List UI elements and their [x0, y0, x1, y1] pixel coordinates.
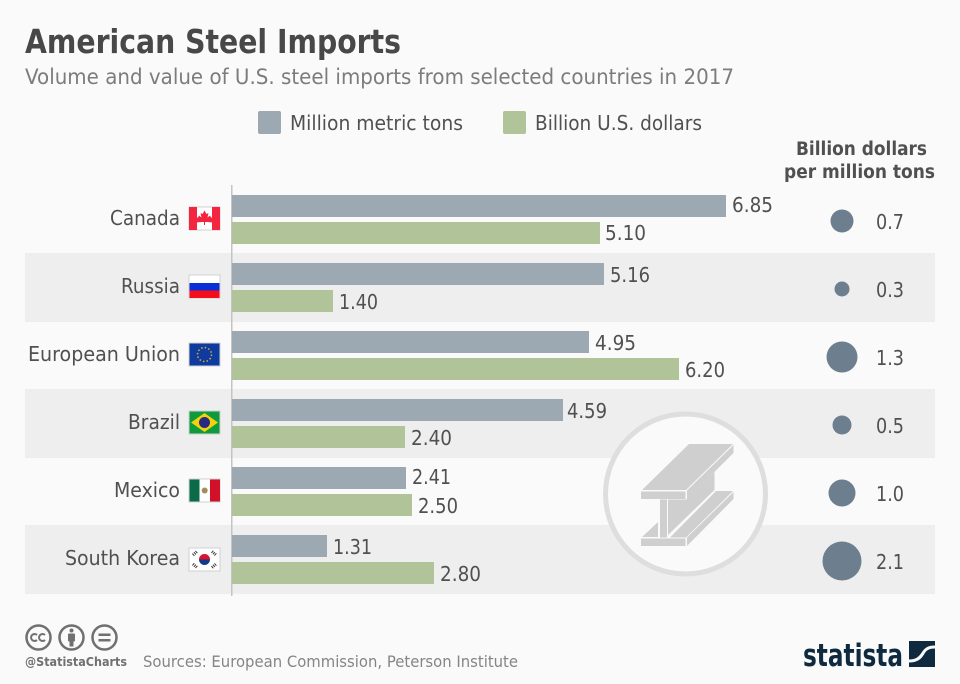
icon: creative commons licence [26, 626, 116, 650]
row: South Korea: 2.1 [876, 550, 904, 574]
row: European Union [28, 331, 904, 382]
legend: Million metric tons [290, 111, 463, 135]
row: Mexico [114, 465, 904, 518]
row: European Union: 1.3 [876, 346, 904, 370]
subtitle: Volume and value of U.S. steel imports from selected countries in 2017 [25, 65, 734, 89]
row: South Korea: 1.31 [333, 535, 372, 559]
row: Brazil: 0.5 [876, 414, 904, 438]
credit handle: @StatistaCharts [25, 654, 127, 669]
row: Brazil [128, 399, 904, 450]
row: Russia: 1.40 [339, 290, 378, 314]
row: Brazil: 2.40 [411, 426, 452, 450]
legend [258, 111, 702, 135]
row: Russia: Russia [121, 274, 180, 298]
row: South Korea: South Korea [65, 546, 180, 570]
column heading: billion dollars per million tons: per million tons [784, 162, 935, 183]
row: Russia: 5.16 [610, 263, 650, 287]
column heading: billion dollars per million tons: Billion dollars [796, 139, 927, 160]
row: European Union: 6.20 [685, 358, 725, 382]
source line: Sources: European Commission, Peterson Institute [143, 652, 518, 671]
row: Canada: 0.7 [876, 210, 904, 234]
row: Russia [121, 263, 904, 314]
row: Canada: 5.10 [605, 221, 646, 245]
row: European Union: European Union [28, 342, 180, 366]
row: Brazil: 4.59 [567, 399, 607, 423]
row: South Korea [65, 535, 904, 586]
legend: Billion U.S. dollars [535, 111, 702, 135]
row: Canada: Canada [110, 206, 180, 230]
row bands [25, 253, 935, 594]
row: European Union: 4.95 [595, 331, 636, 355]
row: Mexico: 1.0 [876, 482, 904, 506]
row: Russia: 0.3 [876, 278, 904, 302]
row: Mexico: 2.41 [412, 465, 451, 489]
statista logo: statista [803, 638, 903, 674]
baseline axis [231, 185, 232, 596]
row: Canada: 6.85 [732, 193, 773, 217]
row: Canada [110, 193, 904, 245]
icon: steel beam in circle [606, 414, 766, 574]
title: American Steel Imports [25, 22, 401, 61]
row: South Korea: 2.80 [440, 562, 481, 586]
row: Brazil: Brazil [128, 410, 180, 434]
column heading: billion dollars per million tons [784, 139, 935, 183]
row: Mexico: 2.50 [418, 494, 458, 518]
row: Mexico: Mexico [114, 478, 180, 502]
